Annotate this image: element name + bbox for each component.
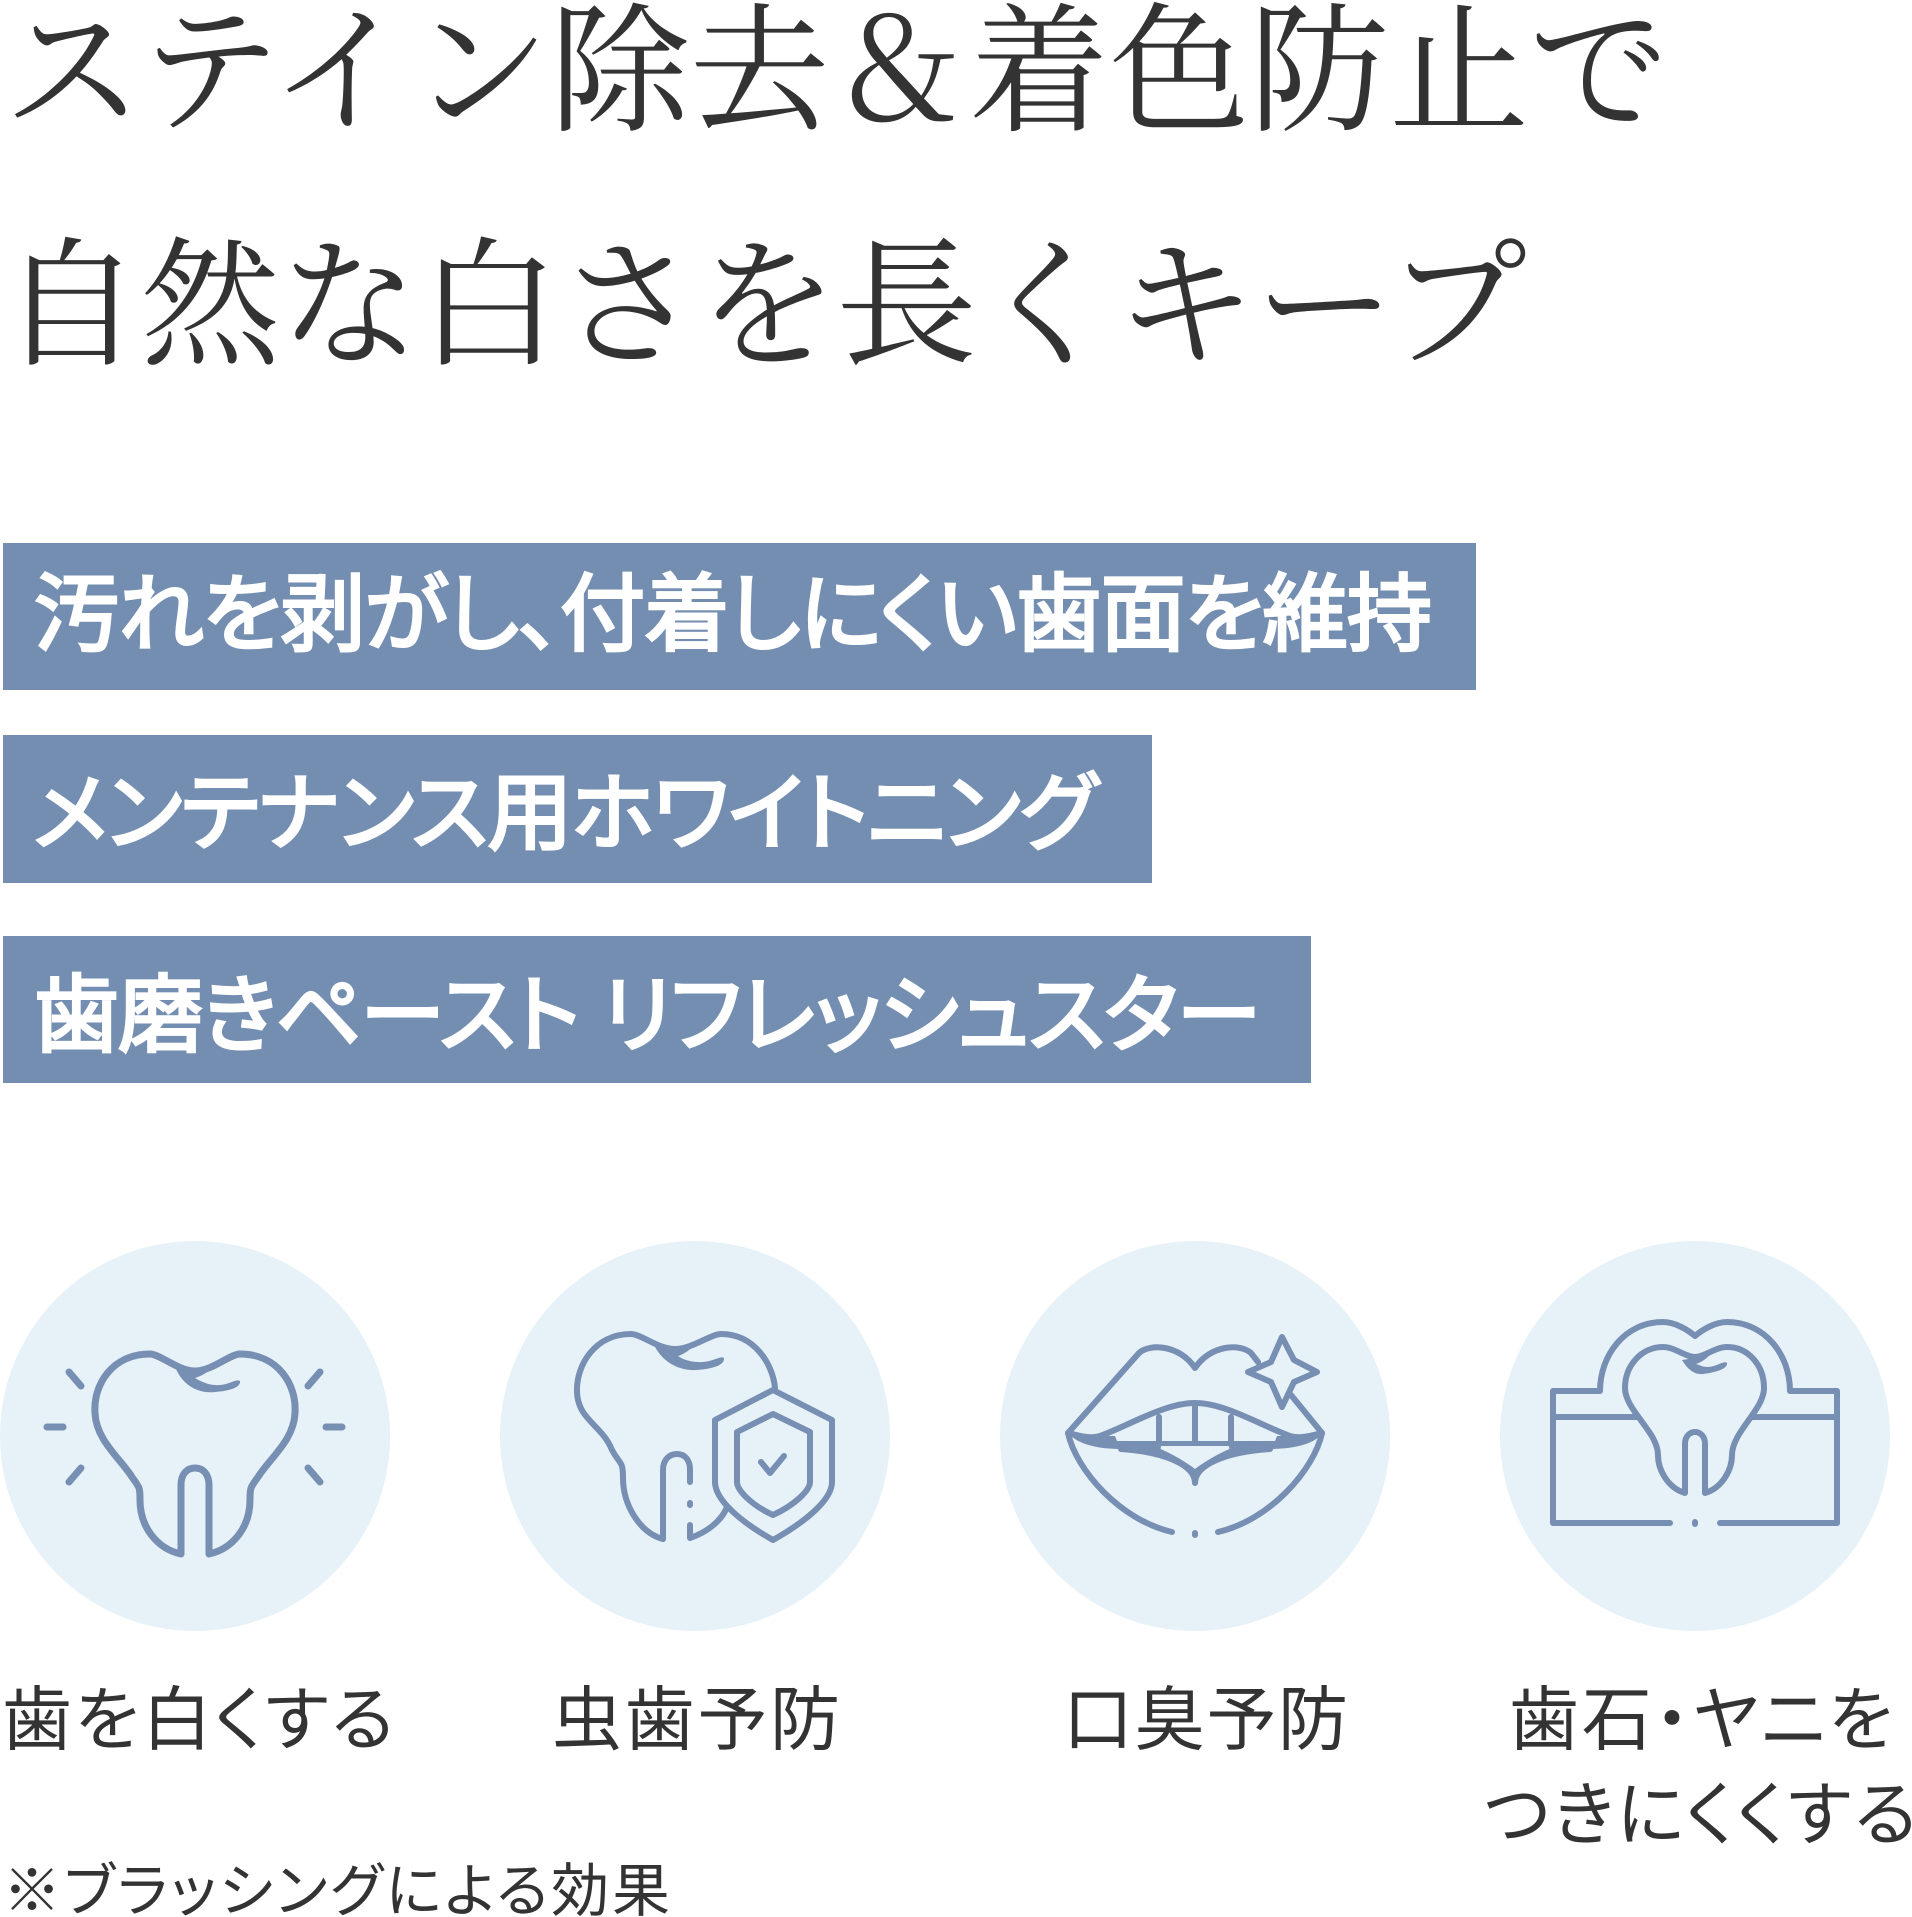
label: cavity prevention: 虫歯予防 — [552, 1681, 840, 1759]
icon: whitening tooth — [0, 1241, 390, 1631]
label: whitening: 歯を白くする — [2, 1681, 394, 1759]
title: ステイン除去＆着色防止で — [3, 0, 1669, 151]
icon: fresh breath lips with sparkle — [1000, 1241, 1390, 1631]
label: tartar and plaque prevention — [1484, 1681, 1912, 1854]
label: bad breath prevention: 口臭予防 — [1063, 1681, 1348, 1759]
label: tartar and plaque prevention: つきにくくする — [1484, 1776, 1912, 1854]
icon: tartar prevention tooth in gum — [1500, 1241, 1890, 1631]
title — [1, 0, 1669, 385]
banner: maintenance whitening — [3, 735, 1152, 883]
icon: cavity prevention tooth and shield — [500, 1241, 890, 1631]
banner: stain removal feature: 汚れを剥がし、付着しにくい歯面を維持 — [34, 568, 1432, 663]
label: tartar and plaque prevention: 歯石・ヤニを — [1509, 1681, 1893, 1759]
banner: maintenance whitening: メンテナンス用ホワイトニング — [33, 767, 1100, 862]
banner: toothpaste product name: 歯磨きペースト リフレッシュスター — [34, 969, 1261, 1064]
banner: toothpaste product name — [3, 936, 1311, 1083]
banner: stain removal feature — [3, 543, 1476, 690]
title: 自然な白さを長くキープ — [1, 230, 1527, 385]
